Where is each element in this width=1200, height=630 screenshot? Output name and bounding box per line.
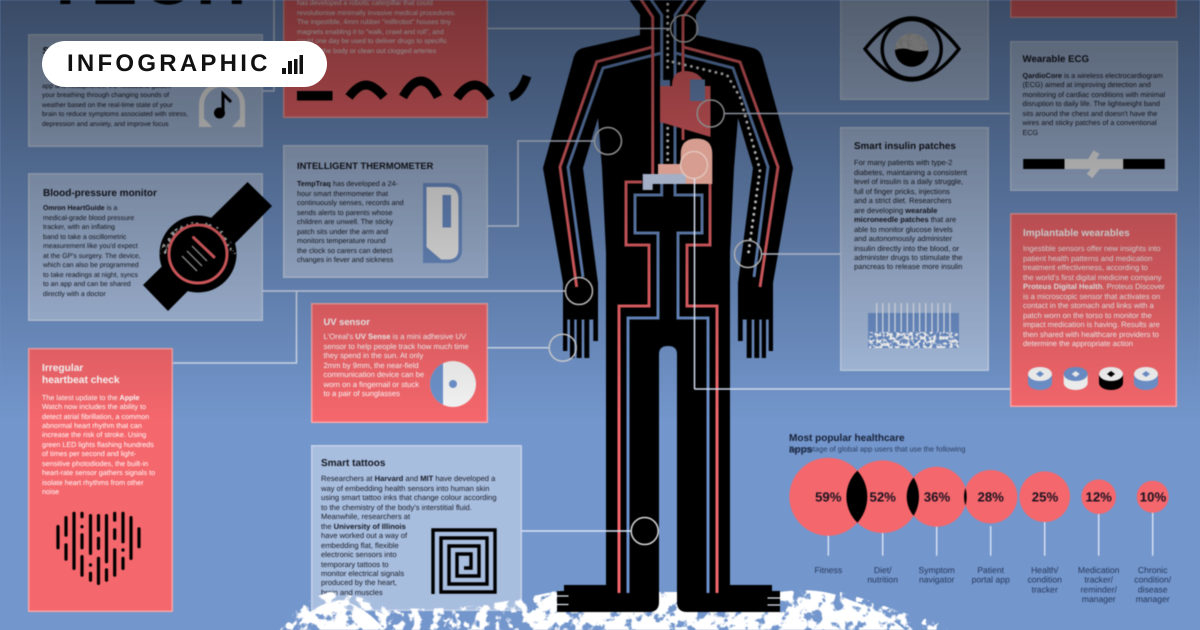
percent values: 25% — [1032, 489, 1058, 504]
text: caterpillar description: has developed a robotic caterpillar that could — [297, 0, 433, 7]
text: ECG description: ECG — [1022, 128, 1038, 137]
text: thermometer description: sends alerts to parents whose — [297, 208, 392, 217]
text: smart tattoos description: Researchers at Harvard and MIT have developed a — [321, 474, 495, 483]
text: smart tattoos description: electronic sensors into — [321, 550, 397, 559]
heading: smart tattoos: Smart tattoos — [321, 458, 385, 469]
text: ECG description: disruption to daily life. The lightweight band — [1022, 99, 1160, 108]
text: heartbeat description: isolate heart rhythms from other — [42, 478, 143, 487]
text: thermometer description: hour smart thermometer that — [297, 189, 388, 198]
text: headband description — [42, 83, 188, 128]
text: blood-pressure description: medical-grade blood pressure — [43, 215, 134, 222]
text: smart tattoos description: Meanwhile, researchers at — [321, 512, 410, 521]
heading: irregular heartbeat check: Irregular — [42, 363, 83, 374]
text: thermometer description: monitors temperature round — [297, 236, 386, 245]
panel: smart headband — [28, 34, 262, 146]
text: smart tattoos description: the University of Illinois — [321, 522, 406, 531]
text: smart tattoos description: to the chemistry of the body's interstitial fluid. — [321, 503, 472, 512]
panel: intelligent thermometer — [283, 145, 488, 278]
logo pill: INFOGRAPHIC — [42, 41, 327, 87]
text: insulin description: insulin directly into the blood, or — [854, 244, 959, 253]
sensor rings — [549, 15, 762, 544]
text: headband description: brain to reduce symptoms associated with stress, — [42, 111, 188, 118]
percent values: 10% — [1140, 489, 1166, 504]
logo wordmark: INFOGRAPHIC — [67, 50, 271, 77]
category labels: condition/ — [1134, 575, 1172, 585]
category labels: portal app — [972, 575, 1010, 585]
text: UV description: sensor to help people track how much time — [324, 342, 469, 351]
text: insulin description: pancreas to release more insulin — [854, 262, 962, 271]
text: blood-pressure description: Omron HeartGuide is a — [43, 205, 117, 212]
text: ECG description: monitoring of cardiac conditions with minimal — [1022, 90, 1165, 99]
text: blood-pressure description: directly with a doctor — [43, 291, 106, 298]
text: smart tattoos description: monitor electrical signals — [321, 569, 404, 578]
text: smart tattoos description: have worked out a way of — [321, 531, 407, 540]
text: insulin description: level of insulin is a daily struggle, — [854, 177, 963, 186]
text: headband description: your breathing through changing sounds of — [42, 92, 169, 99]
category labels: Patient — [977, 565, 1005, 575]
heart — [660, 71, 710, 137]
chart heading: Percentage of global app users that use the following — [789, 444, 965, 454]
percent values: 28% — [977, 489, 1004, 504]
heading: blood-pressure monitor: Blood-pressure monitor — [43, 188, 157, 198]
text: UV description: communication device can be — [324, 370, 424, 379]
text: blood-pressure description: band to take a oscillometric — [43, 234, 126, 241]
panel: blood-pressure monitor — [28, 173, 262, 321]
text: thermometer description: the clock so carers can detect — [297, 246, 392, 255]
text: smart tattoos description: brain and muscles — [321, 588, 383, 597]
organs: stomach, liver and connector — [642, 138, 714, 390]
caterpillar robot icon — [296, 74, 532, 102]
veins: blue — [568, 0, 768, 593]
text: insulin description: microneedle patches that are — [854, 215, 956, 224]
icon: UV disc — [429, 360, 477, 408]
text: heartbeat description: heart-rate sensor gathers signals to — [42, 468, 155, 477]
panel: UV sensor — [310, 303, 488, 423]
text: UV description: they spend in the sun. At only — [324, 351, 423, 360]
category labels: manager — [1136, 594, 1170, 604]
category labels — [814, 565, 1172, 604]
category labels: nutrition — [867, 575, 898, 585]
heading: headband: Smart headband — [42, 46, 121, 57]
panel: wearable ECG — [1010, 41, 1178, 191]
text: blood-pressure description: to an app and can be shared — [43, 281, 131, 288]
text: smart tattoos description: produced by the heart, — [321, 578, 397, 587]
category labels: Chronic — [1138, 565, 1168, 575]
text: smart tattoos description — [320, 474, 497, 597]
text: insulin description: diabetes, maintaining a consistent — [854, 168, 967, 177]
text: insulin description: and a strict diet. Researchers — [854, 196, 952, 205]
text: caterpillar description: magnets enabling it to "walk, crawl and roll", and — [297, 29, 444, 36]
icon: heart made of bars — [56, 511, 142, 586]
icon: headband with music note — [198, 87, 246, 128]
icon: four ingestible sensors — [1027, 366, 1159, 391]
text: implantable description: patch worn on the torso to monitor the — [1023, 311, 1152, 320]
text: ECG description: wires and sticky patches of a conventional — [1022, 118, 1157, 127]
icon: eye — [862, 16, 962, 82]
text: implantable description: Proteus Digital Health. Proteus Discover — [1023, 282, 1165, 291]
text: insulin description: are developing wearable — [854, 206, 937, 215]
text: heartbeat description: abnormal heart rhythm that can — [42, 421, 142, 430]
panel: implantable wearables — [1010, 213, 1177, 407]
text: headband description: app and headphones, the headband guides — [42, 83, 171, 90]
panel: robotic caterpillar — [283, 0, 488, 118]
text: heartbeat description: The latest update to the Apple — [42, 393, 140, 402]
icon: microneedle patch — [868, 302, 960, 348]
category labels: manager — [1082, 594, 1116, 604]
panel: top right red — [1010, 0, 1177, 18]
percent values: 52% — [869, 489, 896, 504]
panel: irregular heartbeat check — [28, 348, 173, 612]
heading: irregular heartbeat check: heartbeat check — [42, 375, 120, 386]
category labels: tracker/ — [1084, 575, 1114, 585]
text: UV description: 2mm by 9mm, the near-field — [324, 361, 419, 370]
text: ECG description — [1022, 71, 1166, 137]
text: insulin description: able to monitor glucose levels — [854, 225, 953, 234]
icon: thermometer patch — [422, 182, 462, 264]
text: implantable description: the world's first digital medicine company — [1023, 273, 1162, 282]
text: heartbeat description — [42, 393, 156, 496]
text: ECG description: (ECG) aimed at improving detection and — [1022, 80, 1151, 89]
icon: wrist cuff monitor — [142, 182, 272, 312]
text: implantable description: treatment effectiveness, according to — [1023, 263, 1148, 272]
category labels: Medication — [1078, 565, 1120, 575]
percent values: 12% — [1085, 489, 1112, 504]
text: thermometer description — [296, 179, 404, 264]
toe lines — [557, 596, 780, 605]
body silhouette — [543, 0, 793, 612]
text: UV description — [323, 332, 469, 398]
text: thermometer description: TempTraq has developed a 24- — [297, 179, 398, 188]
text: ECG description: sits around the chest and doesn't have the — [1022, 109, 1157, 118]
connector stems — [828, 511, 1153, 556]
chart heading: apps — [789, 444, 813, 456]
heading: smart insulin patches: Smart insulin patches — [854, 141, 956, 152]
veins: red — [560, 0, 778, 593]
text: caterpillar description: The ingestible, 4mm rubber "millirobot" houses tiny — [297, 19, 451, 26]
text: blood-pressure description — [42, 204, 141, 298]
category labels: Diet/ — [874, 565, 892, 575]
text: implantable description: determine the appropriate action — [1023, 339, 1133, 348]
text: blood-pressure description: at the GP's surgery. The device, — [43, 253, 141, 260]
text: headband description: weather based on the real-time state of your — [42, 102, 173, 109]
text: blood-pressure description: which can also be programmed — [43, 262, 139, 269]
text: heartbeat description: detect atrial fibrillation, a common — [42, 412, 149, 421]
category labels: navigator — [919, 575, 955, 585]
text: caterpillar description: could one day be used to deliver drugs to specific — [297, 38, 447, 45]
percent values — [815, 489, 1166, 504]
text: implantable description: patient health patterns and medication — [1023, 254, 1153, 263]
text: heartbeat description: noise — [42, 487, 59, 496]
icon: spiral tattoo — [430, 527, 498, 595]
text: blood-pressure description: measurement like you'd expect — [43, 243, 138, 250]
text: UV description: worn on a fingernail or stuck — [324, 380, 419, 389]
text: ECG description: QardioCore is a wireless electrocardiogram — [1022, 71, 1163, 80]
heading: wearable ECG: Wearable ECG — [1022, 54, 1089, 64]
text: implantable description: Ingestible sensors offer new insights into — [1023, 244, 1160, 253]
chart heading: Most popular healthcare — [789, 433, 905, 444]
category labels: reminder/ — [1081, 584, 1117, 594]
text: blood-pressure description: to take readings at night, syncs — [43, 272, 138, 279]
panel: eye sensor — [840, 0, 989, 100]
snow texture at the figure's feet — [280, 590, 948, 630]
text: blood-pressure description: tracker, with an inflating — [43, 224, 115, 231]
heading: implantable wearables: Implantable wearables — [1023, 228, 1130, 239]
text: headband description: depression and anxiety, and improve focus — [42, 121, 169, 128]
panel: smart insulin patches — [840, 127, 989, 371]
text: heartbeat description: increase the risk of stroke. Using — [42, 430, 146, 439]
text: smart tattoos description: temporary tattoos to — [321, 560, 389, 569]
text: implantable description — [1022, 244, 1166, 348]
text: insulin description: administer drugs to stimulate the — [854, 253, 962, 262]
icon: ECG band — [1022, 150, 1166, 178]
text: implantable description: impact medication is having. Results are — [1023, 320, 1160, 329]
chart heading — [789, 433, 965, 456]
text: smart tattoos description: embedding flat, flexible — [321, 541, 399, 550]
text: implantable description: then shared with healthcare providers to — [1023, 330, 1159, 339]
category labels: Fitness — [814, 565, 842, 575]
category labels: disease — [1138, 584, 1168, 594]
text: UV description: L'Oreal's UV Sense is a mini adhesive UV — [324, 332, 466, 341]
text: thermometer description: children are unwell. The sticky — [297, 217, 393, 226]
text: heartbeat description: green LED lights flashing hundreds — [42, 440, 154, 449]
circles — [789, 458, 1169, 536]
percent values: 59% — [815, 489, 842, 504]
category labels: condition — [1027, 575, 1062, 585]
text: insulin description — [854, 158, 968, 271]
text: caterpillar description: revolutionise minimally invasive medical procedures. — [297, 10, 456, 17]
text: heartbeat description: sensitive photodiodes, the built-in — [42, 459, 148, 468]
nerve dots — [668, 0, 760, 256]
text: insulin description: full of finger pricks, injections — [854, 187, 950, 196]
text: heartbeat description: Watch now includes the ability to — [42, 402, 146, 411]
text: thermometer description: continuously senses, records and — [297, 198, 404, 207]
text: heartbeat description: of times per second and light- — [42, 449, 136, 458]
text: implantable description: contact in the stomach and links with a — [1023, 301, 1154, 310]
text: insulin description: For many patients with type-2 — [854, 158, 952, 167]
text: thermometer description: changes in fever and sickness — [297, 255, 393, 264]
heading: UV sensor: UV sensor — [324, 316, 370, 327]
text: caterpillar description — [296, 0, 456, 55]
text: insulin description: and autonomously administer — [854, 234, 952, 243]
text: caterpillar description: parts of the body or clean out clogged arteries — [297, 48, 436, 55]
heading: intelligent thermometer: INTELLIGENT THERMOMETER — [297, 161, 433, 171]
chart: most popular healthcare apps — [788, 433, 1172, 604]
text: UV description: to a pair of sunglasses — [324, 389, 400, 398]
category labels: Health/ — [1031, 565, 1059, 575]
category labels: tracker — [1032, 584, 1058, 594]
text: implantable description: is a microscopic sensor that activates on — [1023, 292, 1160, 301]
percent values: 36% — [924, 489, 950, 504]
panel: smart tattoos — [310, 445, 522, 611]
overlap lenses — [846, 470, 968, 524]
category labels: Symptom — [919, 565, 955, 575]
heading: irregular heartbeat check — [42, 363, 120, 386]
text: thermometer description: patch sits under the arm and — [297, 227, 388, 236]
text: smart tattoos description: way of embedding health sensors into human skin — [321, 484, 489, 493]
text: smart tattoos description: using smart tattoo inks that change colour according — [321, 493, 497, 502]
icon: bars — [282, 55, 303, 74]
